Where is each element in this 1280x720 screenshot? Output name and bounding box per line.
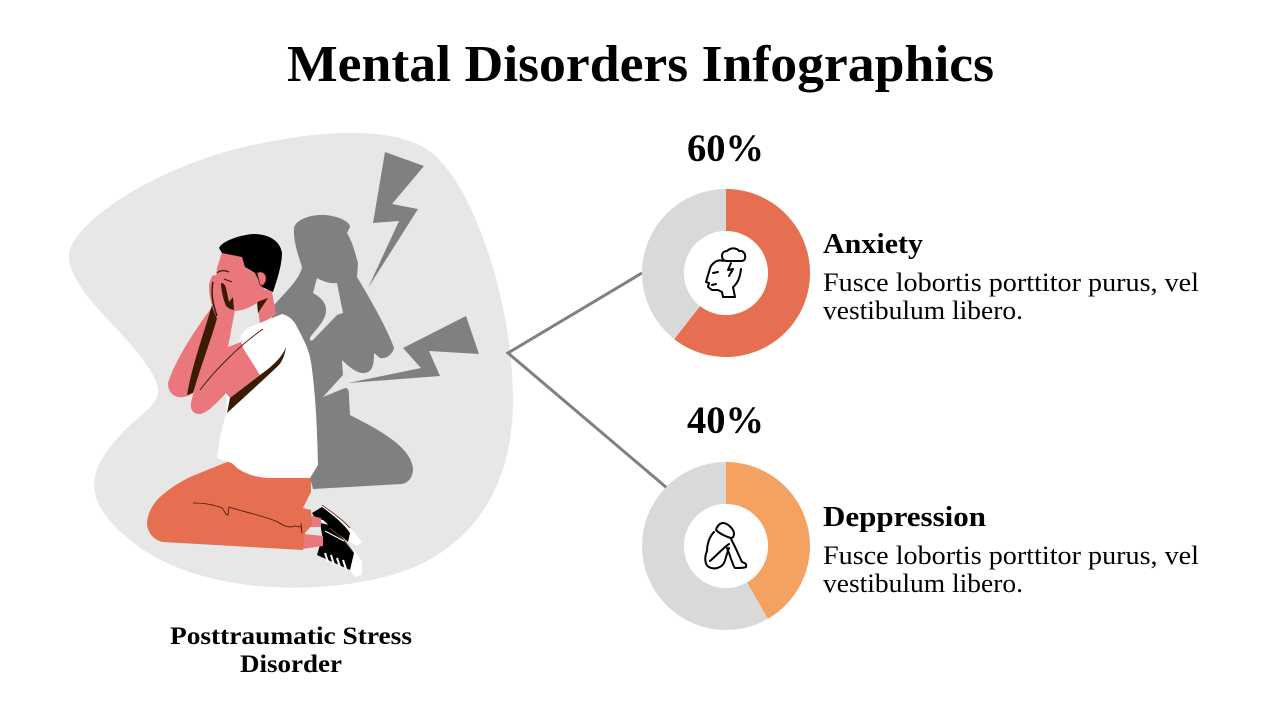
neck [257,288,276,325]
Depression description: vestibulum libero. [823,569,1023,598]
panel: PTSD illustration [69,133,513,588]
icon: head with storm cloud [706,248,745,297]
far arm [168,300,228,397]
icon: lightning bolt upper [368,152,424,288]
shoes [312,504,362,577]
illustration: kneeling man [147,234,362,577]
donut chart: depression 40% [663,462,810,619]
Anxiety description: vestibulum libero. [823,296,1023,325]
donut chart: anxiety 60% [663,189,810,357]
near arm and hand [191,275,260,414]
trousers [147,462,312,550]
connector lines [508,273,667,488]
sleeve overlap [240,335,262,375]
Depression description: Fusce lobortis porttitor purus, vel [823,541,1199,570]
percent: 40%: 40% [687,399,764,442]
shirt [217,314,318,478]
icon: lightning bolt lower [348,316,479,383]
sleeve shadow [227,347,286,413]
percent: 60%: 60% [687,127,764,170]
PTSD caption: Posttraumatic Stress [170,623,412,650]
head [215,252,268,311]
neck shadow [257,298,268,313]
trouser crease [193,503,302,533]
Anxiety heading: Anxiety [823,229,923,260]
PTSD caption: Disorder [240,651,342,678]
feet [302,515,323,549]
Anxiety description: Fusce lobortis porttitor purus, vel [823,268,1199,297]
Anxiety description [823,268,1199,325]
Depression heading: Deppression [823,502,986,533]
finger shadow [221,283,234,310]
background blob [69,133,513,588]
far arm shadow [187,305,218,395]
title: Mental Disorders Infographics [287,36,994,93]
arm crease line [200,329,263,390]
PTSD caption [170,623,412,678]
hair [219,234,282,292]
icon: seated person hugging knees [705,523,746,568]
Depression description [823,541,1199,598]
hand and face details [212,271,232,316]
ear [257,272,266,285]
icon: shadow figure [270,215,413,489]
